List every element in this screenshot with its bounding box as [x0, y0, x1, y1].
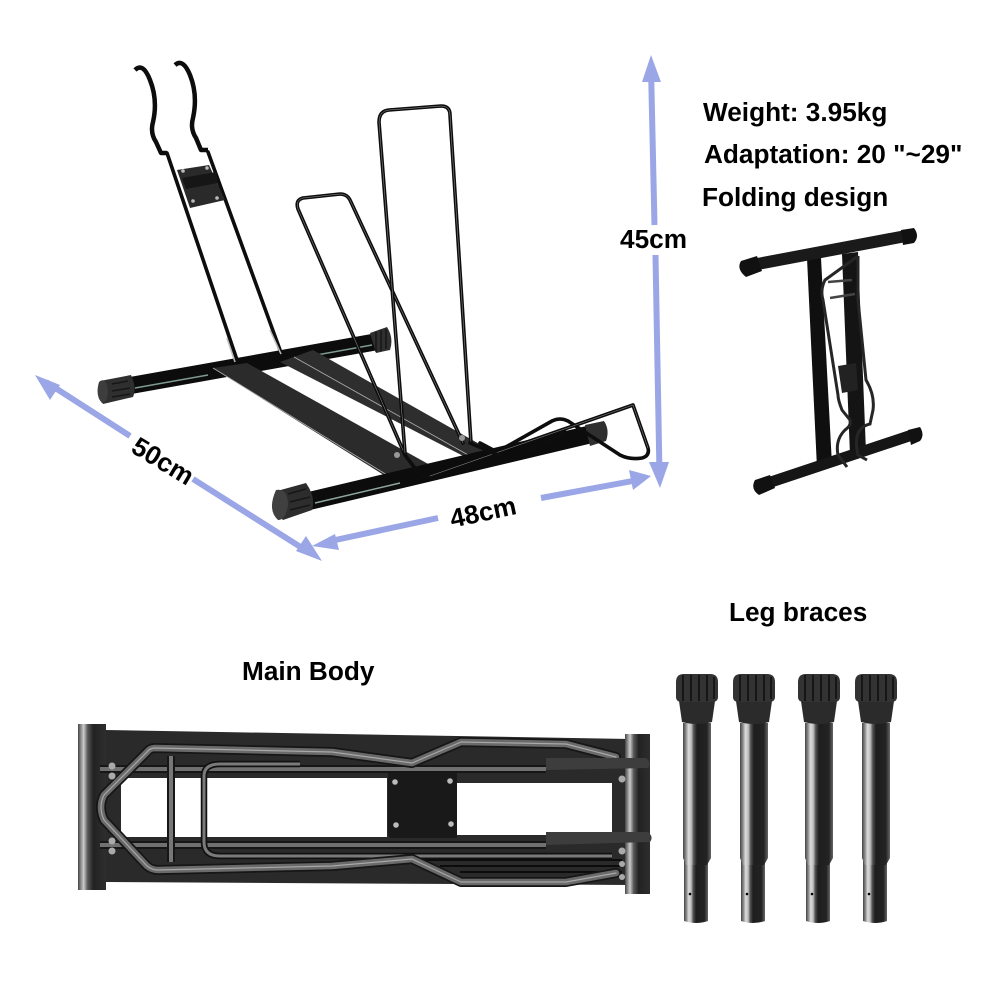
left post — [78, 724, 106, 890]
right post — [625, 734, 650, 894]
photo: leg brace 3 — [798, 674, 840, 923]
heading: main body: Main Body — [242, 656, 375, 686]
folding wheel frames — [297, 106, 648, 477]
weight label: Weight: 3.95kg — [703, 97, 887, 127]
top folded tube — [752, 236, 906, 265]
main photo: assembled bike rack — [98, 63, 648, 520]
rear wheel fork with hooks — [135, 63, 281, 362]
folded wire frames — [822, 256, 858, 467]
photo: leg brace 2 — [733, 674, 775, 923]
front cross tube — [272, 421, 608, 520]
folding hinge bracket — [177, 165, 225, 208]
arrow: height dimension 45cm — [620, 55, 687, 488]
photo: main body folded flat — [78, 724, 652, 894]
title: specifications — [703, 97, 962, 169]
arrow: depth dimension 50cm — [35, 375, 322, 561]
rubber grips — [546, 758, 652, 845]
bolts — [108, 762, 626, 880]
floor rails — [213, 350, 490, 482]
bottom folded tube — [768, 435, 912, 483]
photo: leg brace 4 — [855, 674, 897, 923]
inner U frame — [204, 764, 612, 856]
folded center plate — [838, 363, 858, 393]
adaptation label: Adaptation: 20 "~29" — [704, 139, 962, 169]
heading: leg braces: Leg braces — [729, 597, 867, 627]
label: 48cm: 48cm — [447, 490, 519, 534]
label: 50cm: 50cm — [127, 431, 199, 491]
label: 45cm: 45cm — [620, 224, 687, 254]
folded rails — [807, 258, 832, 468]
arrow: width dimension 48cm — [312, 470, 651, 550]
center mounting plate — [388, 771, 457, 838]
horizontal rods — [100, 756, 622, 872]
outer folded wire — [101, 742, 616, 882]
photo: leg brace 1 — [676, 674, 718, 923]
photo: folded rack — [739, 228, 922, 495]
back cross tube — [98, 327, 391, 404]
heading: folding design: Folding design — [702, 182, 888, 212]
frame plate — [105, 730, 630, 885]
